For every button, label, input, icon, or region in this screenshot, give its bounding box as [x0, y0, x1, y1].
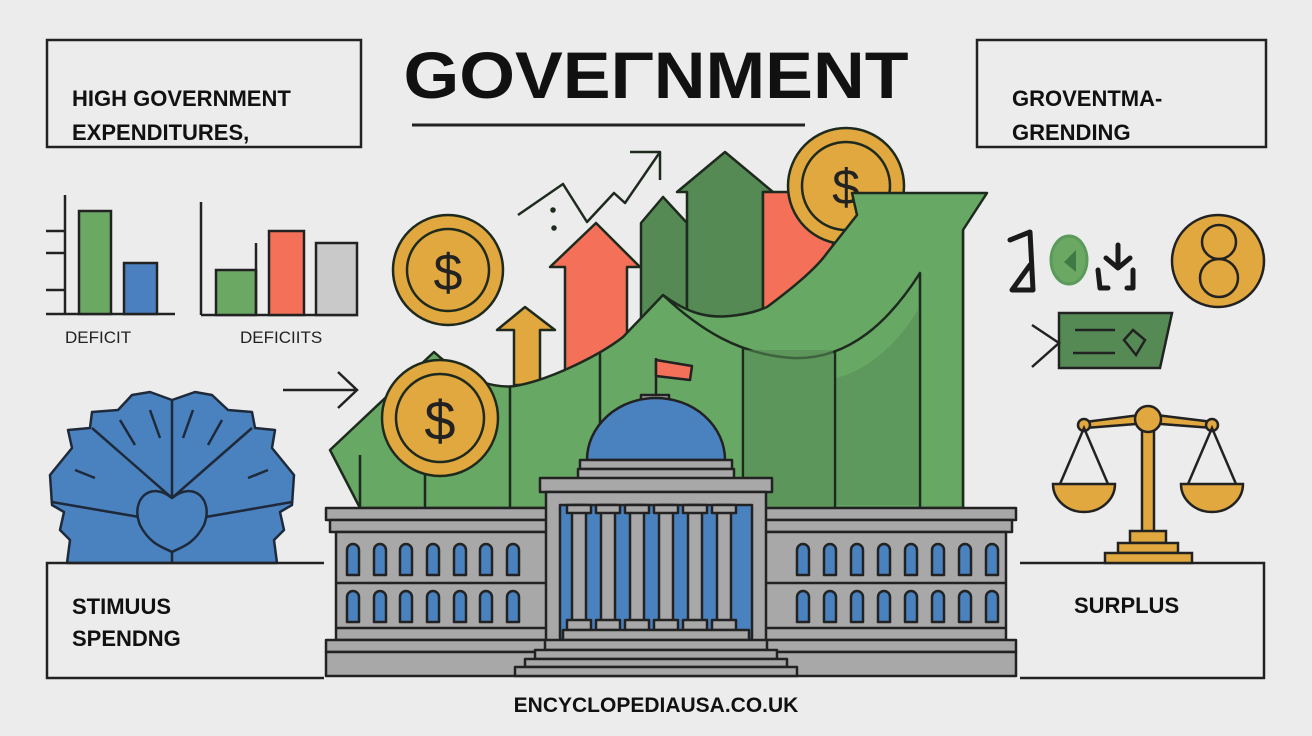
box: groventma-grending	[977, 40, 1266, 147]
coin top right	[788, 128, 904, 244]
wings	[326, 508, 1016, 520]
box: high government expenditures: HIGH GOVERNMENT	[72, 86, 291, 111]
dome	[587, 398, 725, 460]
back green arrows	[641, 197, 687, 330]
footer: ENCYCLOPEDIAUSA.CO.UK	[514, 694, 798, 717]
green mountain arrow	[330, 193, 987, 508]
yellow arrow	[497, 307, 555, 385]
flag	[656, 358, 692, 398]
title: GOVEΓNMENT	[404, 38, 908, 112]
building	[326, 358, 1016, 676]
zigzag trend line	[518, 152, 660, 230]
bar chart: deficiits	[201, 202, 358, 347]
box: surplus	[1020, 563, 1264, 678]
coin top right: $	[832, 159, 860, 215]
icon: balance scale	[1053, 406, 1243, 563]
box: stimulus spending: STIMUUS	[72, 594, 171, 619]
icons: right cluster	[1010, 232, 1133, 290]
icon: coin 8	[1172, 215, 1264, 307]
box: stimulus spending: SPENDNG	[72, 626, 181, 651]
bar chart: deficit: DEFICIT	[65, 328, 131, 347]
chart: rising arrows: $	[424, 389, 456, 452]
central portico	[540, 478, 772, 492]
icon: green ticket	[1032, 313, 1172, 368]
box: groventma-grending: GRENDING	[1012, 120, 1131, 145]
coins: $	[434, 244, 463, 302]
chart: rising arrows	[330, 128, 987, 508]
bar chart: deficiits: DEFICIITS	[240, 328, 322, 347]
box: stimulus spending	[47, 563, 324, 678]
box: groventma-grending: GROVENTMA-	[1012, 86, 1162, 111]
bar chart: deficit	[46, 195, 175, 347]
box: high government expenditures: EXPENDITURES,	[72, 120, 249, 145]
arrow	[283, 372, 357, 408]
box: surplus: SURPLUS	[1074, 593, 1179, 618]
icon: stimulus fan	[50, 392, 294, 563]
coins	[393, 215, 503, 325]
box: high government expenditures	[47, 40, 361, 147]
red arrow and block	[550, 223, 640, 372]
stairs	[545, 640, 767, 650]
